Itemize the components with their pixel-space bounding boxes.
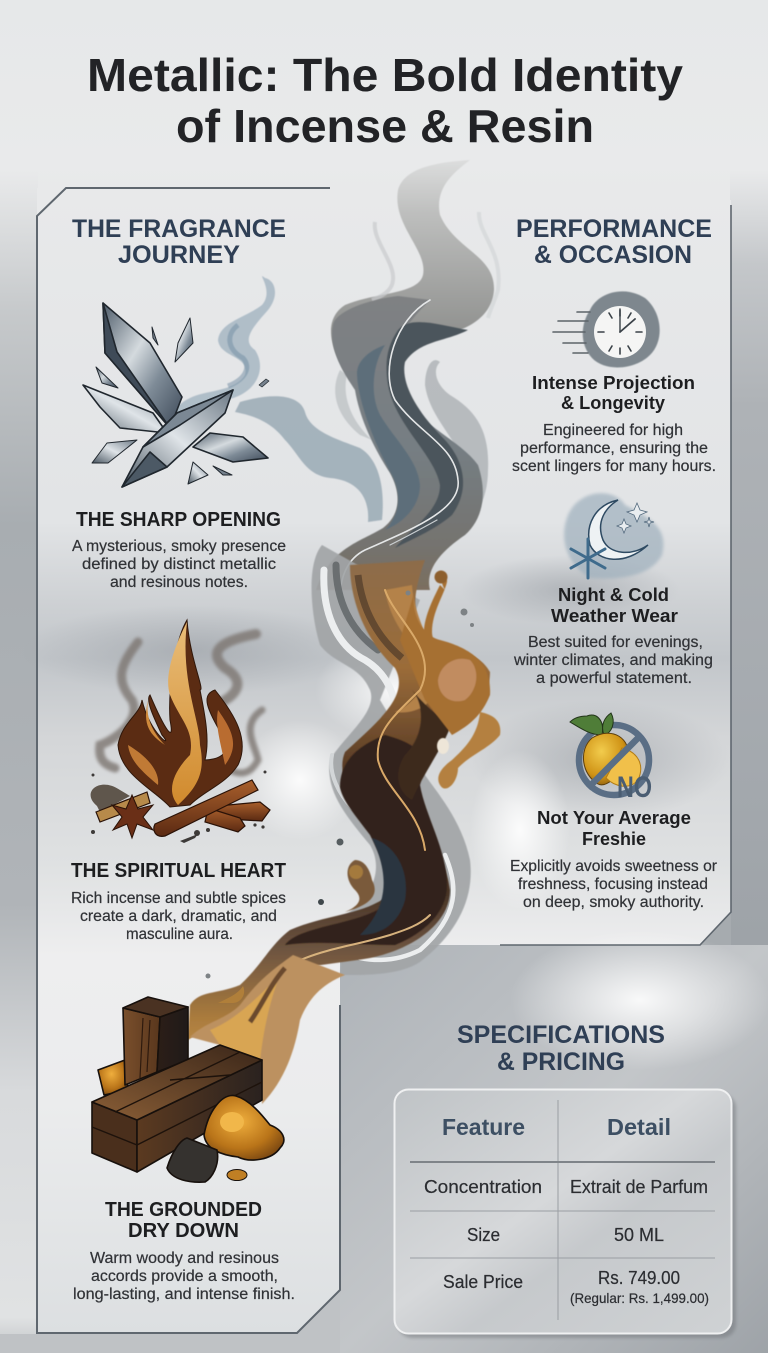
heading: specifications and pricing	[457, 1021, 665, 1076]
table rows: (Regular: Rs. 1,499.00)	[570, 1290, 709, 1306]
table rows: Sale Price	[443, 1272, 523, 1292]
table rows: Extrait de Parfum	[570, 1177, 708, 1197]
title	[87, 49, 683, 152]
heading: the fragrance journey: JOURNEY	[118, 241, 240, 269]
smoke: amber splash	[345, 570, 500, 912]
text: freshie description	[510, 858, 717, 911]
heading: not your average freshie: Not Your Average	[537, 808, 691, 828]
icon: spiritual fire and spices	[91, 620, 270, 843]
table header: Detail	[607, 1114, 671, 1140]
panel: fragrance journey outline	[37, 188, 340, 1333]
heading: intense projection: Intense Projection	[532, 373, 695, 393]
table header: Feature	[442, 1114, 525, 1140]
text: projection description	[512, 422, 716, 475]
fire sticks	[91, 780, 270, 836]
text: spiritual heart description	[71, 890, 286, 943]
heading: the grounded dry down	[73, 1199, 295, 1303]
table rows: Size	[467, 1225, 500, 1245]
heading: night and cold: Weather Wear	[551, 606, 678, 626]
smoke: brown body	[188, 560, 490, 1040]
smoke: silver streaks	[324, 565, 453, 960]
star anise	[112, 795, 153, 838]
fire specks	[91, 770, 266, 843]
smoke: golden tail	[190, 955, 345, 1104]
icon: wood and resin	[92, 997, 284, 1182]
smoke: side wisp from crystals	[172, 276, 383, 522]
text: sharp opening description: and resinous notes.	[110, 574, 248, 591]
fire flames	[118, 620, 242, 807]
heading: intense projection: & Longevity	[561, 393, 665, 413]
text: night description: winter climates, and making	[513, 652, 713, 669]
table header	[442, 1114, 671, 1140]
table rows: Concentration	[424, 1177, 542, 1197]
table rows: 50 ML	[614, 1225, 664, 1245]
smoke: droplets	[206, 590, 474, 1003]
text: spiritual heart description: create a dark, dramatic, and	[80, 908, 277, 925]
smoke: brown stripes	[358, 575, 402, 658]
heading: intense projection	[512, 373, 716, 475]
text: night description	[513, 634, 713, 687]
smoke: outer grey lower layer	[312, 545, 471, 975]
text: dry down description: long-lasting, and intense finish.	[73, 1286, 295, 1303]
smoke: gold highlight lines	[240, 590, 430, 1040]
heading: specifications and pricing: & PRICING	[497, 1048, 625, 1076]
table rows	[424, 1177, 709, 1306]
heading: the grounded dry down: THE GROUNDED	[105, 1199, 262, 1221]
fire smoke	[100, 634, 262, 773]
text: spiritual heart description: masculine aura.	[126, 926, 233, 943]
text: freshie description: freshness, focusing instead	[518, 876, 708, 893]
heading: specifications and pricing: SPECIFICATIONS	[457, 1021, 665, 1049]
heading: the spiritual heart: THE SPIRITUAL HEART	[71, 860, 286, 882]
heading: not your average freshie: Freshie	[582, 829, 646, 849]
heading: performance and occasion	[516, 215, 712, 269]
smoke: dark core	[285, 585, 452, 945]
text: night description: a powerful statement.	[536, 670, 692, 687]
text: dry down description: accords provide a smooth,	[91, 1268, 278, 1285]
text: spiritual heart description: Rich incense and subtle spices	[71, 890, 286, 907]
heading: performance and occasion: PERFORMANCE	[516, 215, 712, 243]
smoke: faint wisps and top plume	[331, 160, 499, 552]
icon: clock with swirl	[553, 291, 660, 367]
icon: metal crystals	[83, 303, 269, 487]
text: sharp opening description: defined by distinct metallic	[82, 556, 276, 573]
table rows: Rs. 749.00	[598, 1268, 680, 1288]
text: dry down description: Warm woody and resinous	[90, 1250, 279, 1267]
icon: no citrus: NO	[617, 771, 652, 804]
heading: not your average freshie	[510, 808, 717, 911]
title: of Incense & Resin	[176, 100, 594, 152]
heading: the grounded dry down: DRY DOWN	[128, 1220, 239, 1242]
text: projection description: Engineered for high	[543, 422, 683, 439]
title: Metallic: The Bold Identity	[87, 49, 683, 101]
text: dry down description	[73, 1250, 295, 1303]
icon: no citrus	[570, 713, 652, 804]
heading: night and cold	[513, 585, 713, 687]
smoke: central grey column	[316, 296, 483, 590]
heading: performance and occasion: & OCCASION	[534, 241, 692, 269]
heading: the fragrance journey: THE FRAGRANCE	[72, 215, 286, 243]
heading: the fragrance journey	[72, 215, 286, 269]
smoke ribbon	[172, 160, 500, 1104]
text: freshie description: Explicitly avoids sweetness or	[510, 858, 717, 875]
heading: night and cold: Night & Cold	[558, 585, 669, 605]
text: night description: Best suited for evenings,	[528, 634, 703, 651]
panel: performance and occasion outline	[500, 205, 731, 945]
smoke: light column lines	[340, 300, 458, 600]
text: projection description: scent lingers for many hours.	[512, 458, 716, 475]
icon: moon and snowflake	[564, 493, 663, 579]
text: projection description: performance, ensuring the	[520, 440, 708, 457]
smoke: dark inner bands	[357, 322, 468, 548]
heading: the spiritual heart	[71, 860, 286, 943]
heading: the sharp opening: THE SHARP OPENING	[76, 509, 281, 531]
heading: the sharp opening	[72, 509, 286, 591]
table: specifications	[394, 1090, 736, 1338]
text: sharp opening description: A mysterious, smoky presence	[72, 538, 286, 555]
text: freshie description: on deep, smoky authority.	[523, 894, 704, 911]
text: sharp opening description	[72, 538, 286, 591]
